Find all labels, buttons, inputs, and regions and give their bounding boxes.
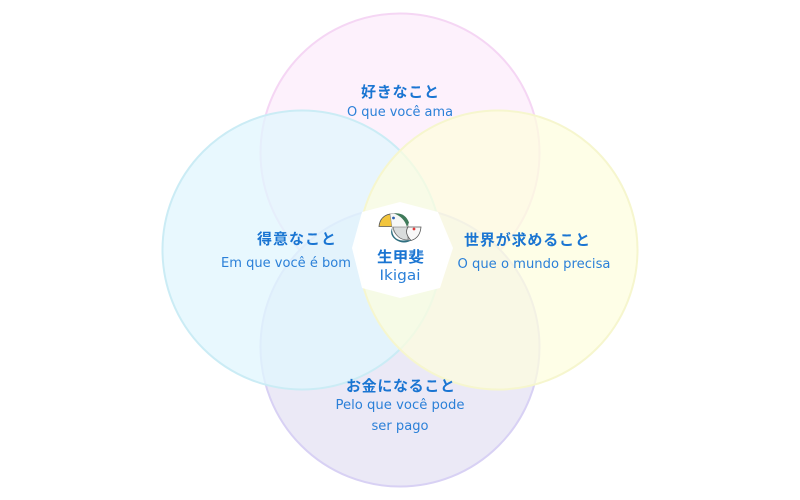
circle: what you are good at: [162, 110, 442, 390]
center label: [377, 249, 424, 284]
label: top: 好きなこと: [361, 84, 439, 101]
circle: what the world needs: [358, 110, 638, 390]
label: right: 世界が求めること: [464, 231, 590, 249]
label: bottom: お金になること: [346, 377, 455, 395]
label: bottom: Pelo que você pode: [336, 398, 464, 413]
label: right: [458, 231, 610, 272]
label: bottom: ser pago: [372, 419, 429, 434]
center white polygon: [352, 202, 453, 298]
label: right: O que o mundo precisa: [458, 257, 610, 272]
center label: 生甲斐: [377, 249, 424, 266]
label: bottom: [336, 377, 464, 434]
icon: ikigai bird logo: [379, 213, 421, 242]
label: left: 得意なこと: [257, 231, 336, 248]
label: left: Em que você é bom: [221, 256, 351, 271]
label: left: [221, 231, 351, 271]
circle: what you love: [260, 14, 540, 292]
circle: what you are paid for: [260, 208, 540, 486]
label: top: [347, 84, 453, 120]
label: top: O que você ama: [347, 105, 453, 120]
center label: Ikigai: [380, 268, 420, 284]
